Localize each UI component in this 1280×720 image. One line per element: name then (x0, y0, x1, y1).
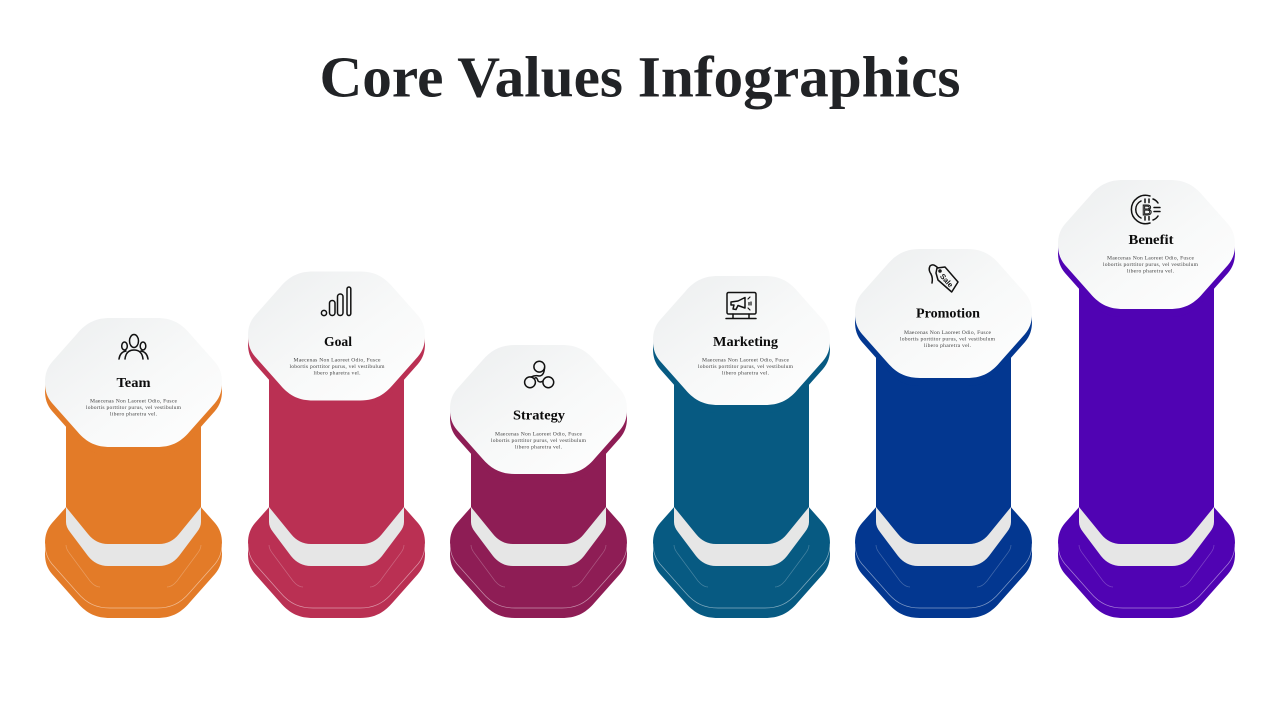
text: Team: lobortis porttitor purus, vel vestibulum (86, 405, 182, 411)
column: Benefit (1058, 180, 1235, 618)
base: Strategy (450, 479, 627, 618)
band: Benefit (1079, 507, 1214, 566)
band: Team (66, 507, 201, 566)
text: Goal: lobortis porttitor purus, vel vestibulum (290, 364, 385, 370)
text: Team: Maecenas Non Laoreet Odio, Fusce (90, 399, 178, 405)
bar: Strategy (471, 430, 606, 544)
card: Benefit (1058, 180, 1235, 309)
column: Team (45, 318, 222, 618)
text: Benefit: libero pharetra vel. (1127, 268, 1175, 274)
text: Goal: libero pharetra vel. (314, 370, 361, 376)
text: Marketing: Maecenas Non Laoreet Odio, Fusce (702, 358, 790, 364)
title: Core Values Infographics (320, 44, 960, 110)
text: Promotion: lobortis porttitor purus, vel vestibulum (900, 336, 996, 342)
band: Marketing (674, 507, 809, 566)
label: Strategy: Strategy (513, 408, 565, 423)
icon: bitcoin coin (1131, 195, 1160, 224)
card back: Benefit (1058, 188, 1235, 317)
card: Marketing (653, 276, 830, 405)
text: Marketing: libero pharetra vel. (722, 370, 770, 376)
column: Strategy (450, 345, 627, 618)
text: Marketing (698, 358, 794, 376)
icon: megaphone board (726, 292, 756, 318)
text: Benefit (1103, 256, 1199, 274)
card back: Team (45, 326, 222, 455)
column: Promotion (855, 249, 1032, 618)
base: Team (45, 479, 222, 618)
card: Team (45, 318, 222, 447)
label: Goal: Goal (324, 334, 352, 349)
text: Promotion: libero pharetra vel. (924, 343, 972, 349)
bar: Goal (269, 360, 404, 544)
icon: team people (119, 334, 148, 359)
text: Strategy: lobortis porttitor purus, vel vestibulum (491, 438, 587, 444)
label: Marketing: Marketing (713, 334, 778, 349)
text: Goal (290, 358, 385, 376)
card back: Marketing (653, 284, 830, 413)
bar: Marketing (674, 360, 809, 544)
text: Strategy: Maecenas Non Laoreet Odio, Fusce (495, 432, 583, 438)
icon: bitcoin coin: B (1142, 202, 1152, 219)
icon: sale tag: Sale (938, 272, 955, 289)
column: Goal (248, 272, 425, 618)
card: Promotion (855, 249, 1032, 378)
card back: Strategy (450, 353, 627, 482)
bar: Team (66, 400, 201, 544)
label: Benefit: Benefit (1128, 232, 1174, 247)
band: Goal (269, 507, 404, 566)
base: Marketing (653, 479, 830, 618)
text: Goal: Maecenas Non Laoreet Odio, Fusce (294, 358, 381, 364)
card: Strategy (450, 345, 627, 474)
base: Goal (248, 479, 425, 618)
card: Goal (248, 272, 425, 400)
base: Promotion (855, 479, 1032, 618)
text: Team (86, 399, 182, 418)
text: Benefit: lobortis porttitor purus, vel vestibulum (1103, 262, 1199, 268)
base: Benefit (1058, 479, 1235, 618)
band: Strategy (471, 507, 606, 566)
text: Benefit: Maecenas Non Laoreet Odio, Fusce (1107, 256, 1195, 262)
icon: three linked circles (525, 361, 554, 388)
text: Team: libero pharetra vel. (110, 412, 158, 418)
text: Promotion: Maecenas Non Laoreet Odio, Fusce (904, 330, 992, 336)
icon: sale tag (929, 265, 958, 292)
card back: Promotion (855, 257, 1032, 386)
bar: Promotion (876, 340, 1011, 544)
label: Team: Team (116, 375, 151, 390)
column: Marketing (653, 276, 830, 618)
icon: signal bars (321, 287, 351, 316)
text: Strategy (491, 432, 587, 450)
card back: Goal (248, 279, 425, 408)
band: Promotion (876, 507, 1011, 566)
text: Marketing: lobortis porttitor purus, vel vestibulum (698, 364, 794, 370)
bar: Benefit (1079, 270, 1214, 544)
text: Promotion (900, 330, 996, 349)
text: Strategy: libero pharetra vel. (515, 444, 563, 450)
label: Promotion: Promotion (916, 306, 981, 320)
